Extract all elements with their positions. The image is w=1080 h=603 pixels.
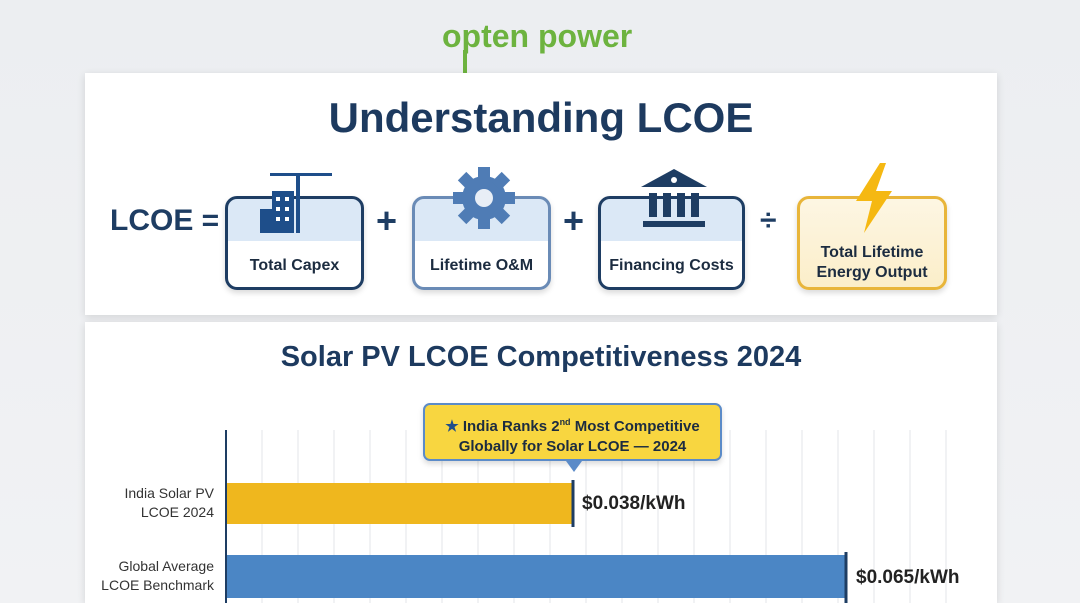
box: Total Capex <box>225 196 364 290</box>
bar chart: $0.065/kWh <box>856 567 960 588</box>
logo <box>442 18 632 73</box>
operator: plus: + <box>563 200 584 241</box>
bar chart: $0.038/kWh <box>582 493 686 514</box>
logo: opten power <box>442 18 632 54</box>
box: Total Lifetime Energy Output: Total Lifetime <box>821 244 923 261</box>
callout <box>423 403 722 461</box>
bar chart: LCOE Benchmark <box>101 577 214 593</box>
box: Financing Costs: Financing Costs <box>609 257 734 274</box>
icon: lightning <box>856 163 892 233</box>
box: Total Lifetime Energy Output <box>797 196 947 290</box>
box: Lifetime O&M <box>412 196 551 290</box>
bar: Global <box>227 555 846 598</box>
bar chart: LCOE 2024 <box>141 504 214 520</box>
callout: Globally for Solar LCOE — 2024 <box>459 438 686 455</box>
bar chart <box>101 430 960 603</box>
box: Total Capex: Total Capex <box>250 257 339 274</box>
panel: LCOE formula <box>85 73 997 315</box>
bar chart: India Solar PV <box>124 485 214 501</box>
formula label: LCOE = <box>110 204 219 237</box>
callout: ★ India Ranks 2nd Most Competitive <box>445 417 700 435</box>
chart title: Solar PV LCOE Competitiveness 2024 <box>281 341 801 373</box>
operator: plus: + <box>376 200 397 241</box>
box: Total Lifetime Energy Output: Energy Output <box>816 264 928 281</box>
panel: chart <box>85 322 997 603</box>
box: Lifetime O&M: Lifetime O&M <box>430 257 533 274</box>
bar chart: Global Average <box>119 558 214 574</box>
box: Financing Costs <box>598 196 745 290</box>
bar: India <box>227 483 573 524</box>
icon: bank <box>641 169 707 227</box>
icon: gear <box>453 167 515 229</box>
operator: divide: ÷ <box>760 204 776 237</box>
title: Understanding LCOE <box>329 94 753 141</box>
icon: building crane <box>260 173 332 233</box>
